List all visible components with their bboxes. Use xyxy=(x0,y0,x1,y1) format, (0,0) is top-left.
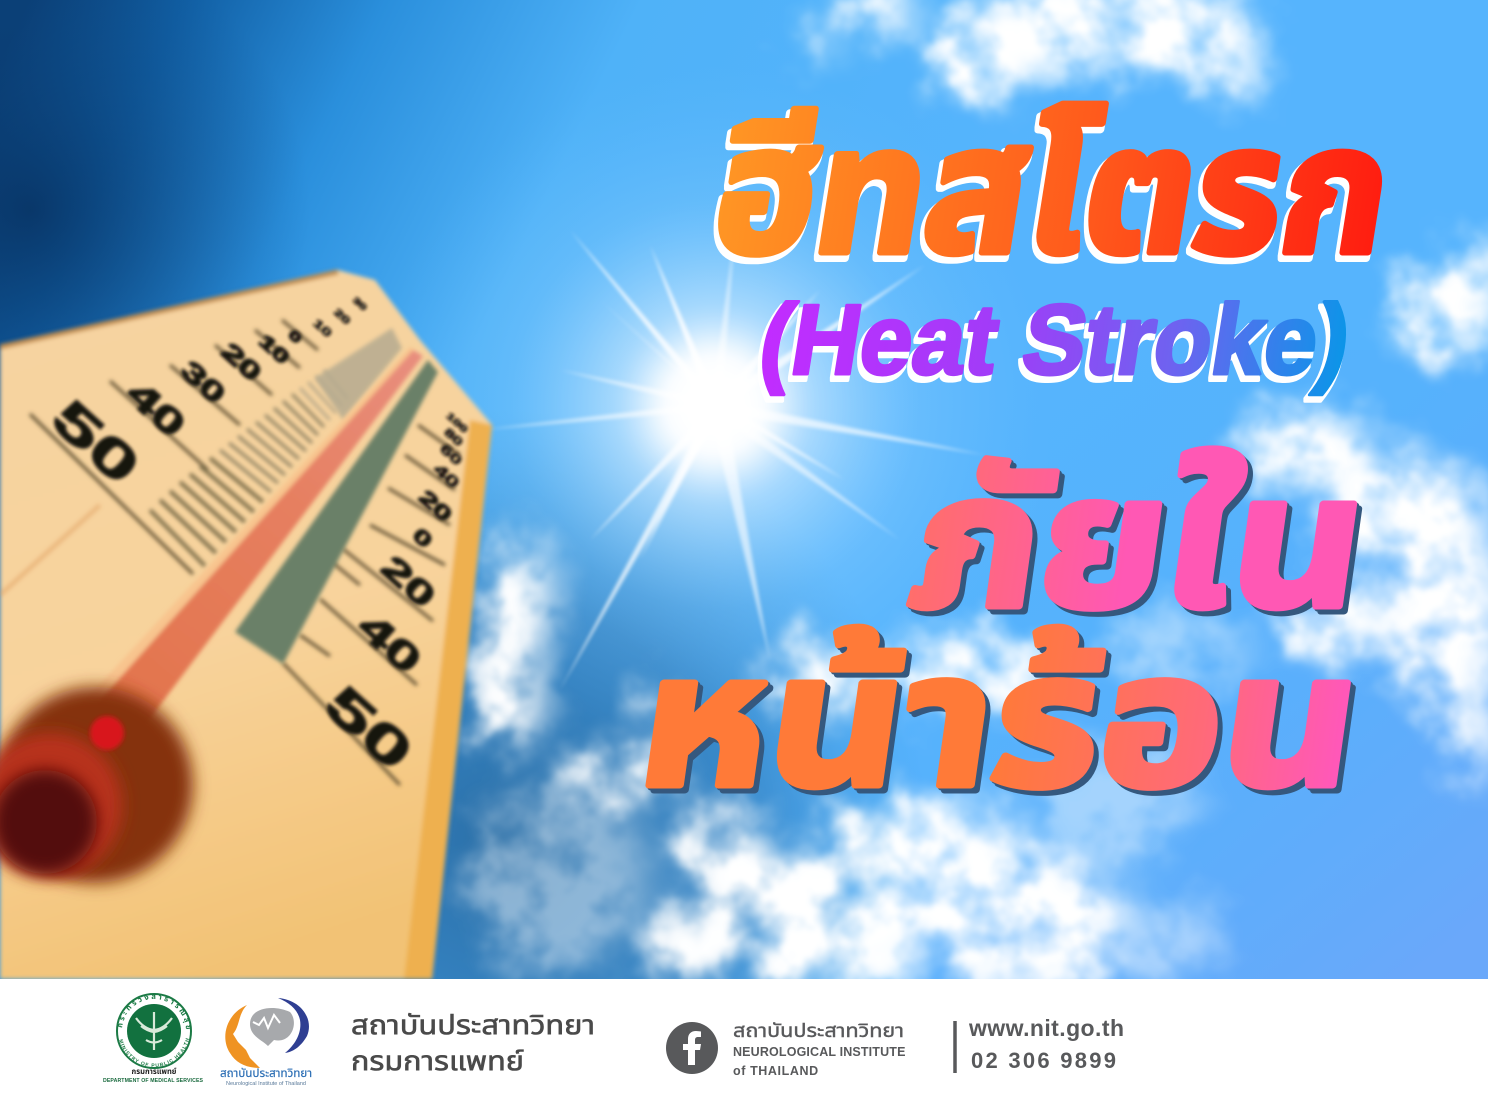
grey-green scale band xyxy=(235,360,438,664)
scale numbers right: 80 xyxy=(441,426,465,449)
institute name: สถาบันประสาทวิทยา xyxy=(351,1010,595,1040)
website and phone xyxy=(968,1015,1124,1073)
scale numbers left xyxy=(41,296,368,496)
sun core xyxy=(657,347,773,463)
facebook page name xyxy=(733,1021,906,1078)
scale numbers left: 20 xyxy=(216,337,267,386)
clouds xyxy=(470,0,1488,995)
facebook page name: NEUROLOGICAL INSTITUTE xyxy=(733,1045,906,1059)
scale numbers right: 60 xyxy=(437,441,465,468)
upper right cloud xyxy=(1395,240,1488,360)
thermometer body xyxy=(0,270,492,979)
logo: neurological institute: Neurological Institute of Thailand xyxy=(226,1081,306,1087)
title: Thai heat stroke: ฮีทสโตรก xyxy=(702,91,1405,290)
scale numbers left: 10 xyxy=(310,317,334,340)
scale numbers left: 30 xyxy=(351,296,368,313)
top cloud xyxy=(801,0,1266,100)
logo: ministry of public health xyxy=(103,993,204,1084)
sun rays xyxy=(480,230,985,690)
scale numbers left: 40 xyxy=(119,373,193,446)
website and phone: www.nit.go.th xyxy=(968,1015,1124,1041)
logo: ministry of public health: MINISTRY OF PUBLIC HEALTH xyxy=(119,1038,189,1067)
scale numbers right: 0 xyxy=(408,524,437,552)
bottom cloud mass xyxy=(474,530,1130,995)
footer band xyxy=(103,993,1124,1087)
upper grey band xyxy=(315,328,402,420)
scale numbers right: 40 xyxy=(430,461,462,492)
scale numbers left: 0 xyxy=(285,327,305,346)
title: English subtitle: (Heat Stroke) xyxy=(753,285,1358,396)
facebook page name: of THAILAND xyxy=(733,1064,819,1078)
logo: ministry of public health: DEPARTMENT OF MEDICAL SERVICES xyxy=(103,1078,204,1084)
headline: summer: หน้าร้อน xyxy=(627,617,1373,825)
scale numbers right: 100 xyxy=(444,411,470,435)
right cloud xyxy=(1240,410,1488,774)
website and phone: 02 306 9899 xyxy=(971,1048,1116,1073)
institute name xyxy=(351,1010,595,1076)
scale numbers left: 30 xyxy=(175,354,232,410)
scale numbers left: 20 xyxy=(332,306,353,327)
logo: ministry of public health: กระทรวงสาธารณสุข xyxy=(118,995,190,1029)
scale numbers right: 20 xyxy=(374,549,442,615)
scale ticks xyxy=(30,320,460,785)
comb ticks upper-left xyxy=(150,458,263,566)
thermometer bulb xyxy=(0,687,193,883)
scale numbers left: 50 xyxy=(41,389,150,496)
facebook page name: สถาบันประสาทวิทยา xyxy=(733,1021,904,1042)
scale numbers right: 50 xyxy=(314,675,423,782)
scale numbers right: 20 xyxy=(415,486,456,526)
mercury tube xyxy=(104,348,424,716)
headline: danger in: ภัยใน xyxy=(899,438,1379,646)
scale numbers right: 40 xyxy=(350,604,430,682)
icon: facebook xyxy=(666,1022,718,1074)
logo: neurological institute: สถาบันประสาทวิทยา xyxy=(220,1067,312,1080)
thermometer xyxy=(0,270,492,979)
logo: neurological institute xyxy=(220,998,312,1087)
institute name: กรมการแพทย์ xyxy=(351,1046,524,1076)
logo: ministry of public health: กรมการแพทย์ xyxy=(132,1067,177,1076)
scale numbers left: 10 xyxy=(255,331,293,368)
scale numbers right xyxy=(324,410,470,768)
